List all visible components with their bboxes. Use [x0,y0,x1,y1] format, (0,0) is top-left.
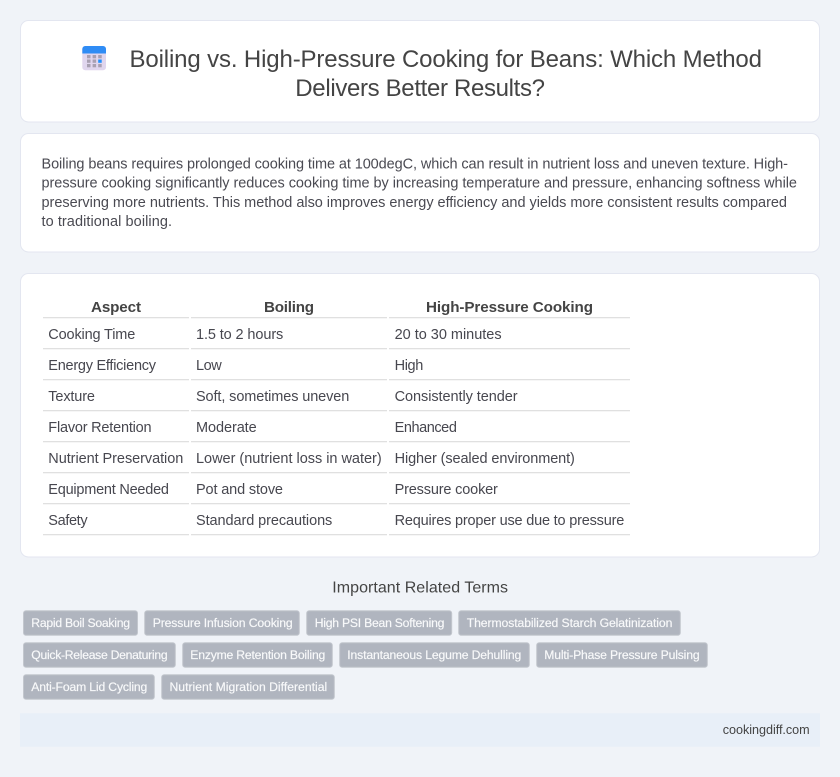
table row: energy efficiency: Low [196,358,222,374]
tag: enzyme retention boiling [183,643,332,667]
table header row: Aspect [91,299,141,316]
table row: energy efficiency: Energy Efficiency [48,358,157,374]
tag: nutrient migration differential [162,675,334,699]
tag: instantaneous legume dehulling [340,643,529,667]
table row: cooking time [43,327,630,349]
title: Delivers Better Results? [295,75,545,102]
title [130,46,762,102]
table row: nutrient preservation: Higher (sealed environment) [395,451,575,467]
tag: anti-foam lid cycling: Anti-Foam Lid Cycling [31,680,147,694]
table row: flavor retention: Enhanced [395,420,457,436]
table row: nutrient preservation: Nutrient Preservation [48,451,183,467]
tag: multi-phase pressure pulsing [537,643,707,667]
tag: thermostabilized starch gelatinization [459,611,680,635]
table row: equipment needed: Equipment Needed [48,482,169,498]
table row: safety: Standard precautions [196,513,332,529]
table row: energy efficiency: High [395,358,423,374]
tag: quick-release denaturing: Quick-Release Denaturing [31,648,168,662]
title: Boiling vs. High-Pressure Cooking for Beans: Which Method [130,46,762,73]
tag: pressure infusion cooking: Pressure Infusion Cooking [153,616,293,630]
table row: texture: Soft, sometimes uneven [196,389,349,405]
tag: pressure infusion cooking [145,611,299,635]
tag: rapid boil soaking: Rapid Boil Soaking [31,616,130,630]
text block: summary: to traditional boiling. [42,214,172,230]
heading: important related terms: Important Related Terms [332,580,508,597]
panel: comparison table [20,274,820,557]
table row: safety: Safety [48,513,88,529]
table row: cooking time: Cooking Time [48,327,135,343]
icon: calendar [82,46,106,70]
table row: texture: Texture [48,389,95,405]
footer bar [20,713,820,747]
table row: texture: Consistently tender [395,389,518,405]
text block: summary: preserving more nutrients. This method also improves energy efficiency and yields more consistent results compared [42,195,787,211]
panel: header [20,20,820,122]
table row: nutrient preservation [43,451,630,473]
tag: high psi bean softening [307,611,452,635]
tag: high psi bean softening: High PSI Bean Softening [315,616,444,630]
tag: thermostabilized starch gelatinization: Thermostabilized Starch Gelatinization [467,616,672,630]
footer source text: cookingdiff.com [723,723,810,737]
table row: safety [43,513,630,535]
table row: flavor retention: Flavor Retention [48,420,152,436]
table row: cooking time: 1.5 to 2 hours [196,327,283,343]
tag: multi-phase pressure pulsing: Multi-Phase Pressure Pulsing [544,648,700,662]
table header row [43,299,630,318]
table header row: High-Pressure Cooking [426,299,593,316]
tag: instantaneous legume dehulling: Instantaneous Legume Dehulling [347,648,521,662]
table row: equipment needed: Pressure cooker [395,482,498,498]
table row: safety: Requires proper use due to pressure [395,513,624,529]
table header row: Boiling [264,299,314,316]
tag group: related terms [24,611,707,699]
text block: summary: pressure cooking significantly reduces cooking time by increasing temperature and pressure, enhancing softness while [42,176,797,192]
table row: flavor retention [43,420,630,442]
table row: equipment needed: Pot and stove [196,482,283,498]
tag: anti-foam lid cycling [24,675,154,699]
text block: summary: Boiling beans requires prolonged cooking time at 100degC, which can result in nutrient loss and uneven texture. High- [42,156,788,172]
tag: enzyme retention boiling: Enzyme Retention Boiling [190,648,325,662]
table row: flavor retention: Moderate [196,420,257,436]
tag: nutrient migration differential: Nutrient Migration Differential [170,680,327,694]
text block: summary [42,156,797,230]
table row: cooking time: 20 to 30 minutes [395,327,502,343]
panel: summary paragraph [20,134,820,252]
table row: texture [43,389,630,411]
table row: energy efficiency [43,358,630,380]
table row: equipment needed [43,482,630,504]
table row: nutrient preservation: Lower (nutrient loss in water) [196,451,382,467]
tag: rapid boil soaking [24,611,138,635]
tag: quick-release denaturing [24,643,175,667]
